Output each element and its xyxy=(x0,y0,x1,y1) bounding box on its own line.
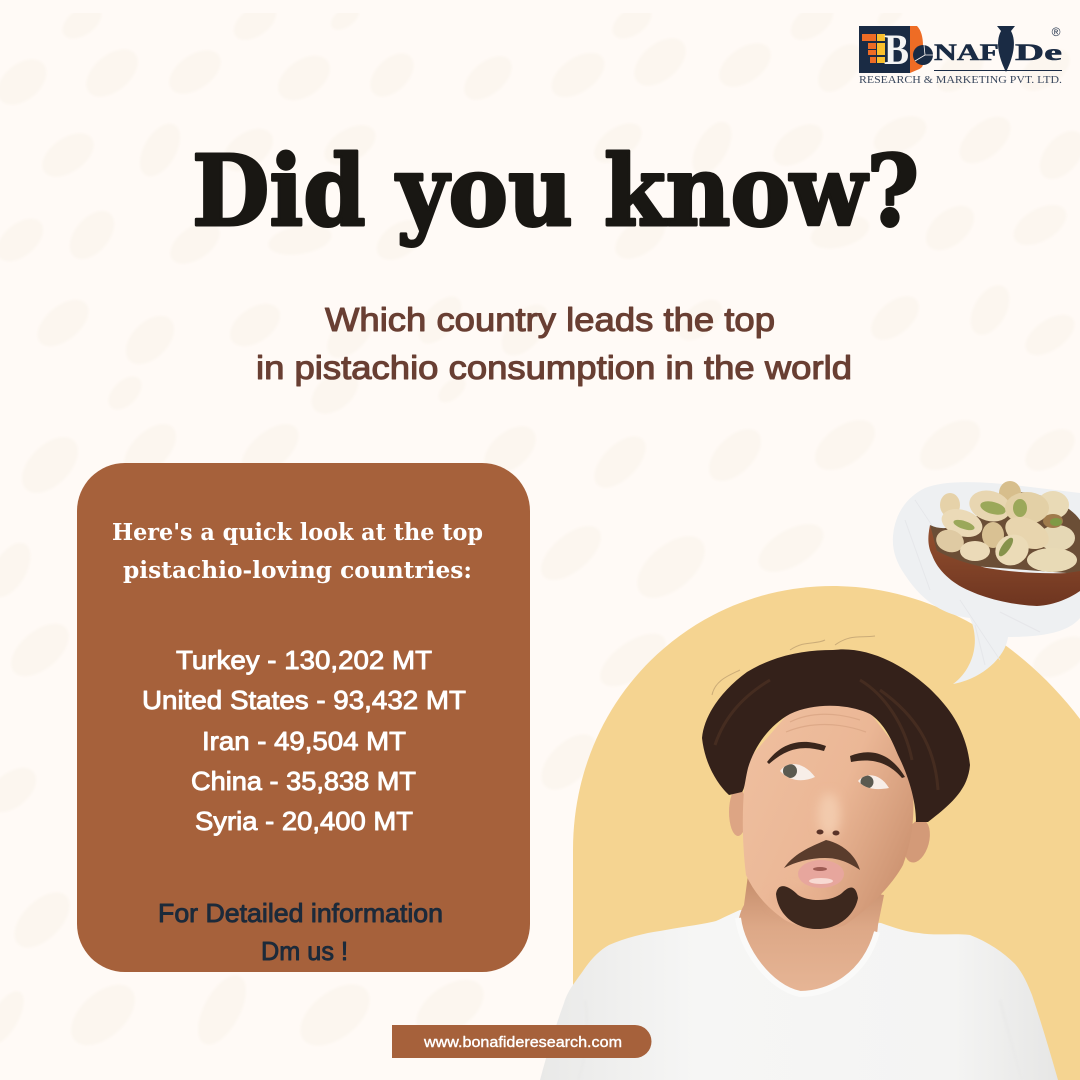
left ear xyxy=(729,788,747,836)
logo tagline: RESEARCH & MARKETING PVT. LTD. xyxy=(859,74,1062,86)
subtitle: Which country leads the top xyxy=(325,301,775,338)
country list: Iran - 49,504 MT xyxy=(202,726,406,756)
website pill xyxy=(392,1025,652,1058)
website pill: www.bonafideresearch.com xyxy=(423,1034,622,1051)
nose xyxy=(816,793,840,837)
call to action: For Detailed information xyxy=(158,898,443,928)
neck xyxy=(738,875,884,992)
country list: China - 35,838 MT xyxy=(191,766,416,796)
country list xyxy=(142,645,466,836)
face xyxy=(743,700,913,929)
pistachios xyxy=(934,481,1077,572)
logo wordmark xyxy=(934,40,1062,65)
logo wordmark: NAF xyxy=(934,40,999,65)
stray hair xyxy=(712,636,875,695)
country list: Syria - 20,400 MT xyxy=(195,806,413,836)
left eyebrow xyxy=(767,742,826,764)
logo mark: B xyxy=(884,27,909,74)
left eye xyxy=(780,764,815,780)
logo mark xyxy=(859,26,933,74)
subtitle xyxy=(256,301,852,386)
country list: Turkey - 130,202 MT xyxy=(176,645,432,675)
bowl wall xyxy=(928,525,1080,606)
panel heading: pistachio-loving countries: xyxy=(123,557,472,584)
speech bubble with bowl of pistachios xyxy=(893,481,1080,684)
logo rule xyxy=(934,70,1062,71)
call to action xyxy=(158,898,443,966)
subtitle: in pistachio consumption in the world xyxy=(256,349,852,386)
panel heading: Here's a quick look at the top xyxy=(112,519,483,546)
forehead wrinkles xyxy=(786,714,866,732)
logo pen nib xyxy=(997,26,1015,72)
lips xyxy=(798,860,844,888)
hair highlights xyxy=(715,680,938,790)
face shading xyxy=(770,888,830,912)
moustache xyxy=(784,840,860,870)
logo registered mark: ® xyxy=(1052,25,1061,39)
panel heading xyxy=(112,519,483,584)
logo wordmark: De xyxy=(1015,40,1062,65)
panel: top pistachio-loving countries xyxy=(77,463,530,972)
paper bubble xyxy=(893,482,1080,684)
shirt shading xyxy=(578,1000,1022,1080)
right ear xyxy=(900,817,934,865)
call to action: Dm us ! xyxy=(261,936,348,966)
paper creases xyxy=(905,500,1040,665)
goatee xyxy=(776,886,858,929)
shirt collar xyxy=(738,918,877,994)
right eyebrow xyxy=(850,752,905,778)
bowl interior xyxy=(930,492,1080,574)
right eye xyxy=(858,775,889,789)
logo: Bonafide Research & Marketing xyxy=(859,25,1062,86)
man looking up xyxy=(540,636,1058,1080)
yellow arch xyxy=(573,586,1080,1080)
title: Did you know? xyxy=(192,134,919,248)
panel background xyxy=(77,463,530,972)
hair xyxy=(702,649,970,822)
country list: United States - 93,432 MT xyxy=(142,685,466,715)
t-shirt xyxy=(540,910,1058,1080)
